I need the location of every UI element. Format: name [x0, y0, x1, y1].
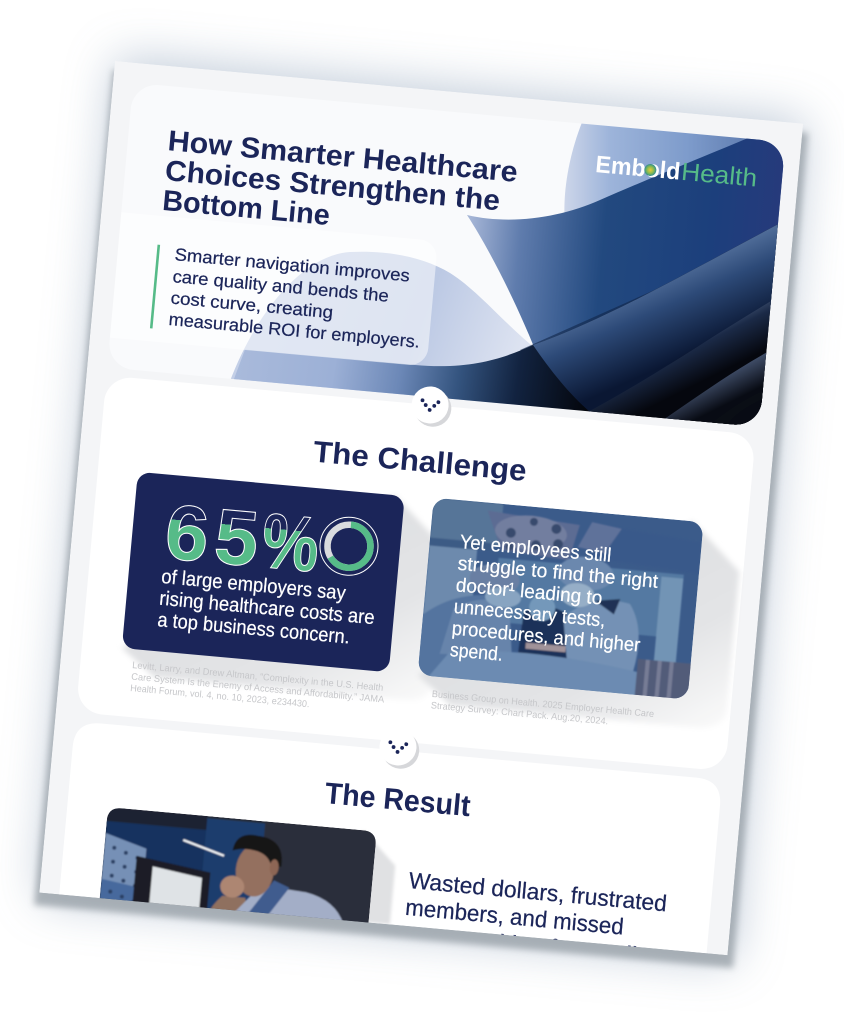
- result text: [406, 872, 666, 947]
- hero subtitle: care quality and bends the: [172, 266, 390, 306]
- green accent bar: [150, 245, 160, 329]
- hero title: [164, 130, 516, 225]
- hero subtitle: cost curve, creating: [170, 288, 334, 322]
- citation: Levitt: Care System Is the Enemy of Access and Affordability.” JAMA: [131, 672, 385, 706]
- citation: Business Group on Health: Strategy Survey: Chart Pack. Aug.20, 2024.: [430, 700, 609, 727]
- result text: opportunities for quality: [401, 921, 658, 970]
- surgeon card text: procedures, and higher: [451, 618, 642, 657]
- surgeon card text: struggle to find the right: [457, 553, 660, 593]
- stat description: [158, 570, 374, 644]
- hero title: Choices Strengthen the: [164, 155, 501, 217]
- stat card: 65%: [122, 472, 405, 672]
- result text: members, and missed: [404, 894, 625, 940]
- surgeon card text: spend.: [449, 639, 504, 666]
- logo: Embold Health: Embold: [594, 151, 681, 186]
- citation: Levitt: Levitt, Larry, and Drew Altman, “Complexity in the U.S. Health: [132, 660, 384, 694]
- stat number: %: [258, 496, 323, 589]
- surgeon card text: unnecessary tests,: [453, 596, 606, 632]
- stat number: [168, 505, 317, 572]
- surgeon card text: [450, 534, 658, 662]
- citation: Business Group on Health: Business Group on Health. 2025 Employer Health Care: [431, 689, 654, 720]
- hero artwork: folded blue pages: [231, 124, 784, 425]
- card shadow: surgeons: [420, 521, 740, 724]
- donut chart 65 percent: [319, 516, 378, 576]
- photo card: tired employee: [100, 808, 376, 922]
- stat description: a top business concern.: [157, 609, 351, 649]
- heading: The Challenge: The Challenge: [312, 436, 528, 488]
- hero title: How Smarter Healthcare: [167, 125, 519, 189]
- translucent text backing panel: [244, 252, 436, 365]
- heading: The Result: The Result: [323, 777, 472, 823]
- panel: hero: [150, 124, 784, 425]
- panel: the challenge: [76, 376, 756, 771]
- connector badge: hero to challenge: [412, 386, 452, 427]
- card shadow: photo: [368, 842, 396, 924]
- logo: Embold Health: Health: [680, 158, 758, 193]
- stat description: rising healthcare costs are: [158, 588, 376, 629]
- surgeon card text: doctor¹ leading to: [455, 574, 603, 610]
- photo card: surgeons: [407, 497, 705, 702]
- card shadow: stat: [122, 495, 430, 696]
- result text: Wasted dollars, frustrated: [408, 867, 668, 916]
- connector badge: challenge to result: [380, 736, 420, 769]
- stat number: 65: [162, 487, 262, 583]
- panel: the result: [57, 721, 722, 974]
- hero title: Bottom Line: [161, 185, 331, 232]
- hero subtitle: Smarter navigation improves: [174, 244, 411, 286]
- surgeon card text: Yet employees still: [459, 531, 612, 567]
- stat description: of large employers say: [160, 566, 347, 605]
- hero subtitle: [168, 244, 427, 352]
- hero subtitle: measurable ROI for employers.: [168, 309, 421, 352]
- logo: Embold Health: [596, 156, 756, 186]
- citation: Levitt: Health Forum, vol. 4, no. 10, 2023, e234430.: [130, 683, 310, 710]
